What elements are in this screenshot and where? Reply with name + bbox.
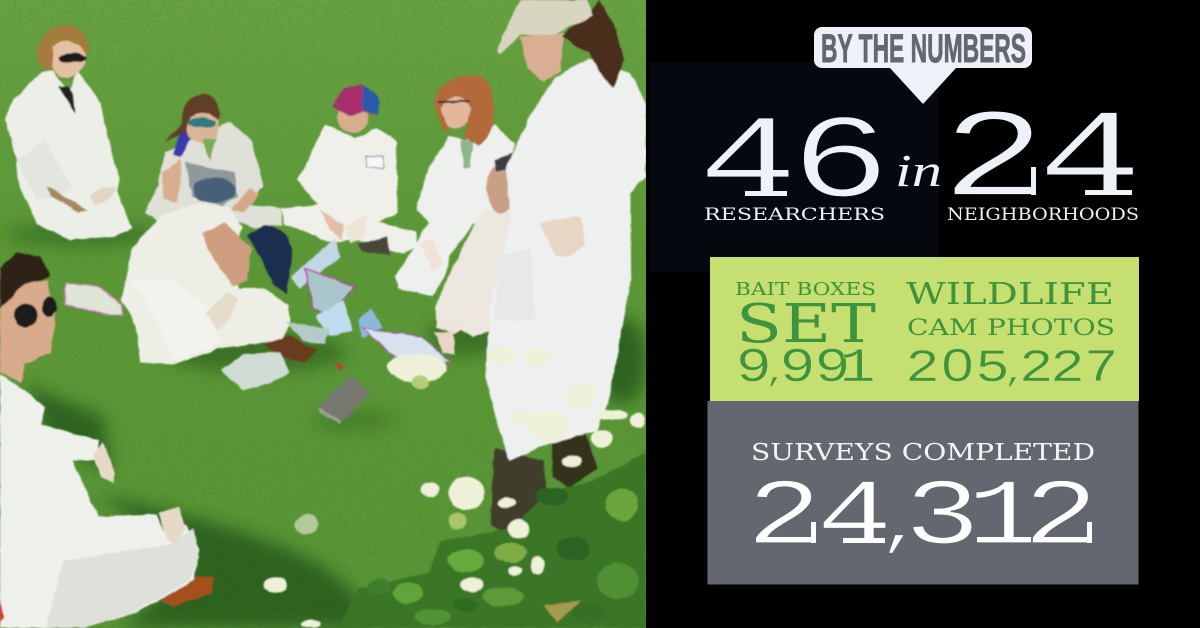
stat: wildlife cam photos: 2 bbox=[905, 343, 940, 395]
stat: bait boxes set: 9 bbox=[736, 342, 772, 396]
person: man bending forward with navy cap bbox=[122, 202, 317, 364]
panel: bait boxes and wildlife cam photos bbox=[710, 257, 1139, 401]
right statistics panel bbox=[650, 27, 1143, 584]
stat: wildlife cam photos: 5 bbox=[975, 343, 1010, 395]
stat: wildlife cam photos bbox=[905, 277, 1118, 395]
panel: surveys completed: 24 bbox=[746, 465, 893, 572]
panel: surveys completed: , bbox=[878, 495, 925, 561]
panel: surveys completed: SURVEYS COMPLETED bbox=[751, 440, 1095, 466]
stat: 24 neighborhoods: NEIGHBORHOODS bbox=[947, 205, 1139, 224]
white Queen Anne's lace flowers bbox=[264, 347, 645, 628]
stat: 46 researchers: 46 bbox=[698, 97, 891, 232]
stat: bait boxes set: , bbox=[765, 357, 788, 391]
grass shadows bbox=[4, 222, 647, 628]
person: woman with red curly hair bbox=[396, 75, 515, 296]
callout: by the numbers bbox=[814, 27, 1032, 104]
bait bags and supplies on the grass bbox=[64, 238, 451, 390]
stat: wildlife cam photos: 227 bbox=[1019, 343, 1118, 395]
callout: by the numbers: BY THE NUMBERS bbox=[821, 27, 1026, 71]
person: standing woman with tan cap bbox=[485, 0, 646, 541]
person: crouching woman behind standing woman bbox=[435, 151, 517, 354]
foliage bottom right bbox=[338, 453, 646, 628]
metal bait box bbox=[318, 376, 371, 425]
dark navy backing panel bbox=[650, 62, 939, 272]
stat: wildlife cam photos: 0 bbox=[942, 340, 973, 392]
photo: researchers in white suits sitting on grass bbox=[0, 0, 646, 628]
panel: surveys completed bbox=[708, 401, 1138, 584]
stat: 24 neighborhoods: 24 bbox=[941, 91, 1143, 234]
grass background bbox=[0, 0, 646, 628]
stat: bait boxes set: SET bbox=[736, 294, 876, 355]
stat: bait boxes set: BAIT BOXES bbox=[735, 280, 876, 300]
stat: wildlife cam photos: , bbox=[1004, 357, 1026, 391]
stat: wildlife cam photos: WILDLIFE bbox=[906, 277, 1114, 312]
person: woman with blue glove bbox=[145, 94, 282, 228]
stat: wildlife cam photos: CAM PHOTOS bbox=[907, 316, 1115, 341]
connector word: in: in bbox=[895, 145, 942, 196]
person: seated woman top left bbox=[5, 25, 132, 240]
stat: bait boxes set bbox=[735, 280, 876, 396]
stat: bait boxes set: 991 bbox=[779, 342, 876, 396]
stat: 46 researchers: RESEARCHERS bbox=[704, 205, 885, 225]
person: woman with pink and blue cap bbox=[280, 85, 418, 254]
person: man with sunglasses bottom left bbox=[0, 252, 214, 628]
panel: surveys completed: 312 bbox=[904, 465, 1099, 572]
